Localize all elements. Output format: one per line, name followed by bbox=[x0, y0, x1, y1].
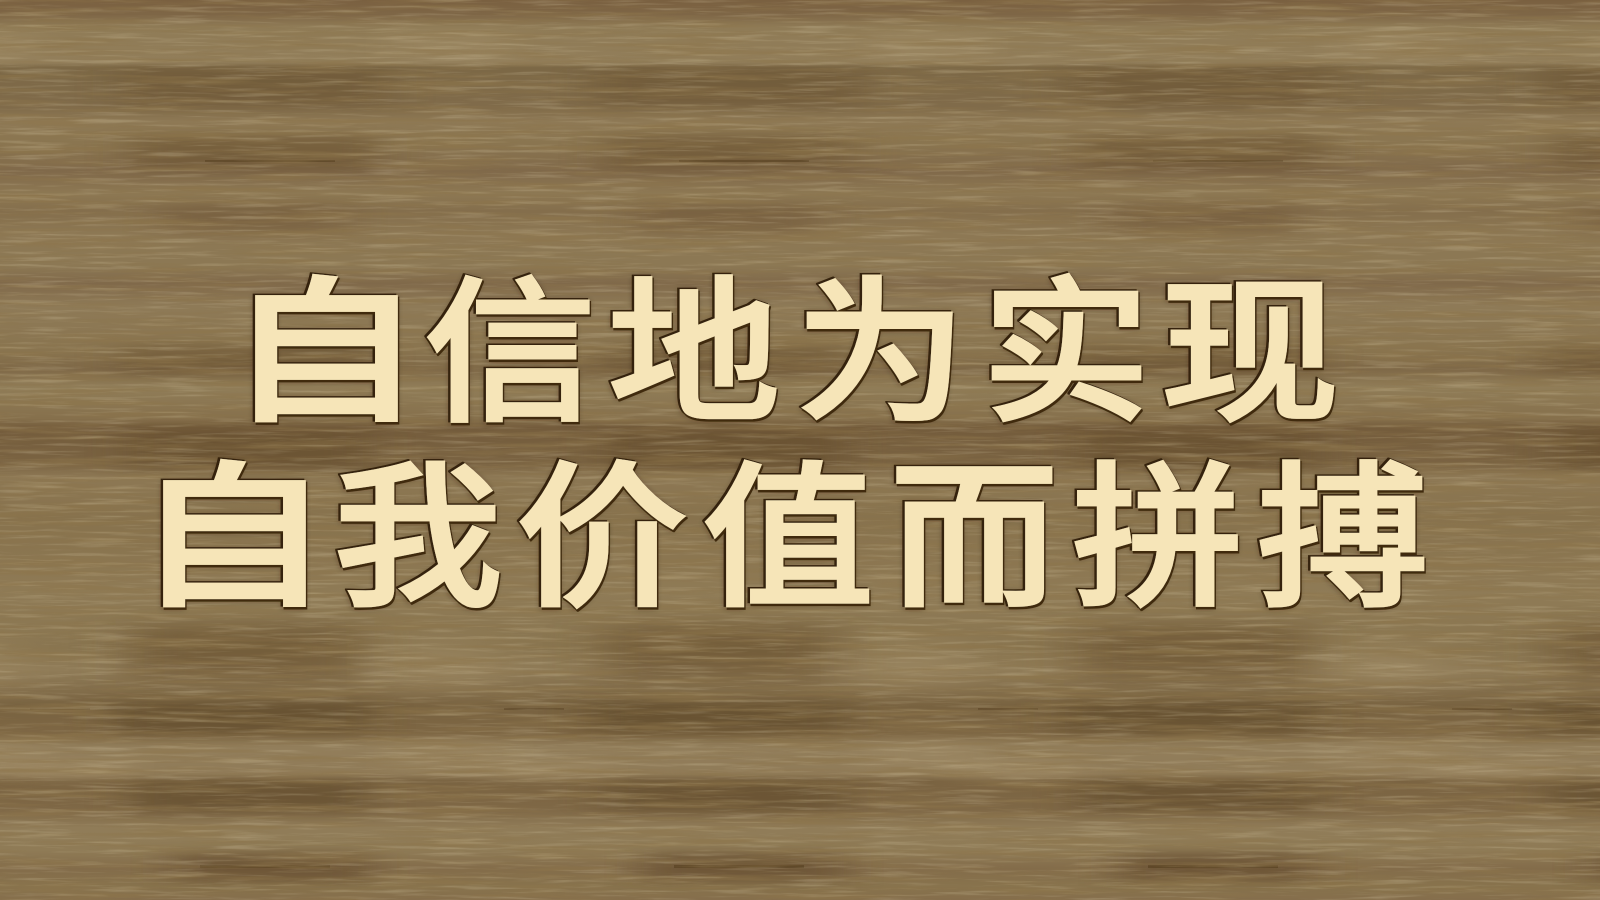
title line 1: 实 bbox=[981, 266, 1151, 442]
title line 2: 自 bbox=[134, 451, 332, 626]
title line 2: 而 bbox=[889, 451, 1059, 627]
title line 1 bbox=[226, 266, 1339, 442]
title line 2: 搏 bbox=[1257, 451, 1429, 626]
title line 2 bbox=[134, 451, 1429, 627]
title line 2: 拼 bbox=[1072, 451, 1244, 626]
title line 1: 信 bbox=[424, 266, 596, 441]
title line 2: 值 bbox=[702, 451, 874, 626]
title line 1: 自 bbox=[226, 266, 424, 441]
title line 1: 为 bbox=[795, 266, 967, 441]
title line 2: 价 bbox=[516, 451, 688, 626]
title line 1: 现 bbox=[1161, 266, 1339, 442]
title bbox=[134, 266, 1429, 627]
title line 2: 我 bbox=[333, 451, 503, 627]
title line 1: 地 bbox=[608, 266, 780, 441]
